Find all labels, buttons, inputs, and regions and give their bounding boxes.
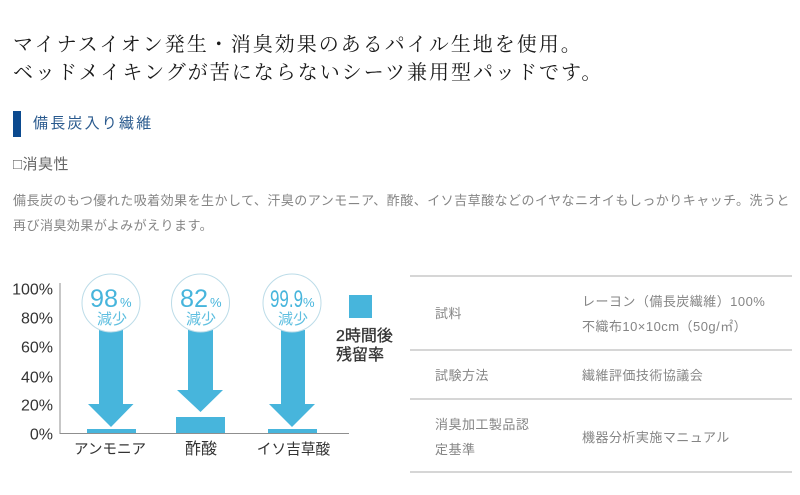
headline: マイナスイオン発生・消臭効果のあるパイル生地を使用。 [13,34,583,56]
column: アンモニア: 98 [90,285,118,313]
bar chart [12,274,393,458]
legend [336,295,393,364]
column: イソ吉草酸: 99.9 [270,286,303,313]
column: イソ吉草酸: % [303,295,315,310]
subheading: □消臭性 [13,156,69,173]
column: アンモニア: 減少 [97,311,127,328]
y axis labels: 60% [21,340,53,356]
column: アンモニア [74,274,146,458]
axes [60,283,349,434]
row: 試験方法: 繊維評価技術協議会 [582,368,703,383]
column: アンモニア: % [120,295,132,310]
legend: 2時間後 [336,327,393,345]
y axis labels: 80% [21,310,53,328]
column: イソ吉草酸: イソ吉草酸 [257,441,331,458]
data table [410,275,792,473]
column: 酢酸: 酢酸 [185,440,217,458]
row: 試験方法: 試験方法 [435,368,489,383]
column: 酢酸: 82 [180,285,208,313]
row: 試料: 不織布10×10cm（50g/㎡） [582,319,747,334]
headline: ベッドメイキングが苦にならないシーツ兼用型パッドです。 [13,62,603,84]
y axis labels: 40% [21,370,53,386]
row: 消臭加工製品認定基準: 消臭加工製品認 [435,417,529,432]
row: 消臭加工製品認定基準: 機器分析実施マニュアル [582,430,730,445]
headline [13,34,603,84]
y axis labels: 0% [30,426,53,444]
column: 酢酸: % [210,295,222,310]
row: 消臭加工製品認定基準: 定基準 [435,442,475,457]
row: 試料: レーヨン（備長炭繊維）100% [582,294,765,309]
column: イソ吉草酸 [257,274,331,458]
y axis labels: 20% [21,398,53,414]
column: アンモニア: アンモニア [74,442,146,458]
row: 試料: 試料 [435,306,462,321]
column: 酢酸 [172,274,230,458]
description text [13,193,790,233]
description text: 備長炭のもつ優れた吸着効果を生かして、汗臭のアンモニア、酢酸、イソ吉草酸などのイヤなニオイもしっかりキャッチ。洗うと [13,193,790,208]
section accent bar [13,111,21,137]
column: 酢酸: 減少 [186,311,216,328]
section heading: 備長炭入り繊維 [33,115,153,132]
column: イソ吉草酸: 減少 [278,311,308,328]
y axis labels [12,282,53,444]
row: 試験方法 [435,368,703,383]
row: 消臭加工製品認定基準 [435,417,730,457]
row: 試料 [435,294,765,334]
description text: 再び消臭効果がよみがえります。 [13,218,213,233]
legend: 残留率 [336,346,384,364]
y axis labels: 100% [12,282,53,298]
